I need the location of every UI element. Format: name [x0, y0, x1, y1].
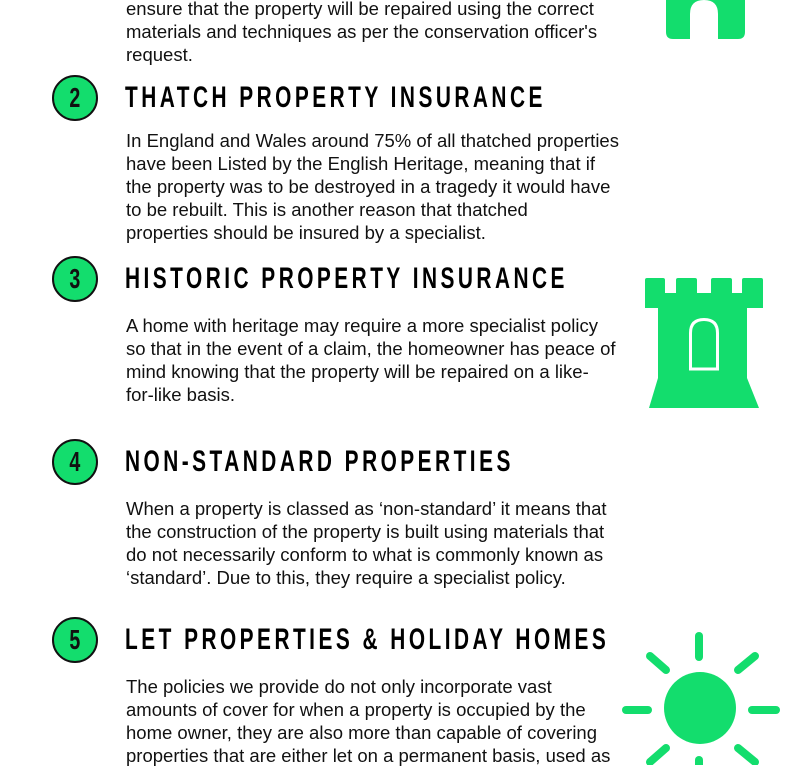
heading 2: THATCH PROPERTY INSURANCE [125, 81, 546, 114]
text 2: properties should be insured by a specialist. [126, 222, 486, 243]
number 4: 4 [70, 446, 80, 477]
number 2 [52, 75, 98, 121]
text: section 1 [126, 0, 597, 65]
heading 5: LET PROPERTIES & HOLIDAY HOMES [125, 623, 609, 656]
text 2 [126, 130, 619, 243]
number 5 [52, 617, 98, 663]
text 5: properties that are either let on a permanent basis, used as [126, 745, 610, 766]
heading 4: NON-STANDARD PROPERTIES [125, 445, 514, 478]
text: section 1: request. [126, 44, 193, 65]
text 4: ‘standard’. Due to this, they require a specialist policy. [126, 567, 566, 588]
text 4: the construction of the property is built using materials that [126, 521, 604, 542]
text 2: have been Listed by the English Heritage, meaning that if [126, 153, 595, 174]
number 3: 3 [70, 263, 80, 294]
text 4 [126, 498, 607, 588]
text 4: When a property is classed as ‘non-standard’ it means that [126, 498, 607, 519]
text 5: amounts of cover for when a property is occupied by the [126, 699, 586, 720]
text 3: mind knowing that the property will be repaired on a like- [126, 361, 589, 382]
text 5: The policies we provide do not only incorporate vast [126, 676, 552, 697]
number 2: 2 [70, 82, 80, 113]
heading 3: HISTORIC PROPERTY INSURANCE [125, 262, 568, 295]
text 3: so that in the event of a claim, the homeowner has peace of [126, 338, 616, 359]
text: section 1: materials and techniques as per the conservation officer's [126, 21, 597, 42]
text 5 [126, 676, 610, 766]
text 3: A home with heritage may require a more specialist policy [126, 315, 598, 336]
text 2: to be rebuilt. This is another reason that thatched [126, 199, 528, 220]
text 2: In England and Wales around 75% of all thatched properties [126, 130, 619, 151]
text 3: for-like basis. [126, 384, 235, 405]
text 5: home owner, they are also more than capable of covering [126, 722, 597, 743]
number 4 [52, 439, 98, 485]
number 5: 5 [70, 624, 80, 655]
text 4: do not necessarily conform to what is commonly known as [126, 544, 603, 565]
text 2: the property was to be destroyed in a tragedy it would have [126, 176, 610, 197]
text 3 [126, 315, 616, 405]
number 3 [52, 256, 98, 302]
